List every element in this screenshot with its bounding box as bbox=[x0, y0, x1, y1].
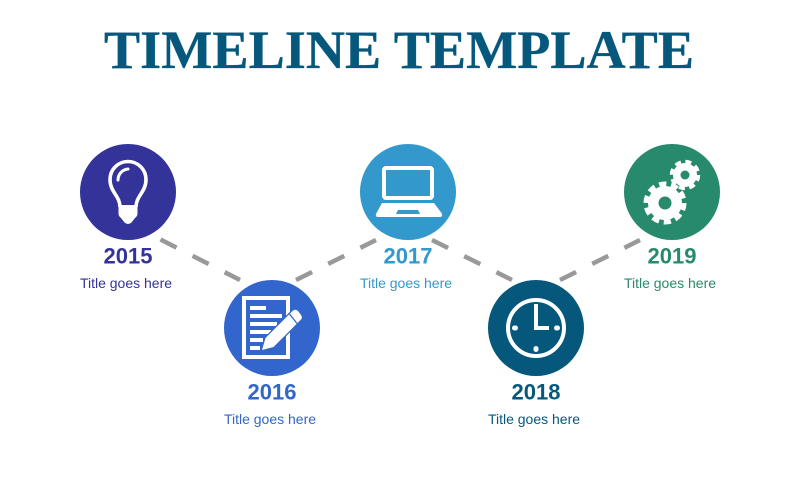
connector: 2018 to 2019 bbox=[560, 240, 640, 280]
label: 2015: Title goes here bbox=[80, 275, 172, 291]
year: 2016: 2016 bbox=[248, 380, 296, 404]
year: 2018: 2018 bbox=[512, 380, 560, 404]
milestone: 2019 bbox=[624, 144, 720, 291]
label: 2017: Title goes here bbox=[360, 275, 452, 291]
circle: 2017 bbox=[360, 144, 456, 240]
connector: 2016 to 2017 bbox=[296, 240, 376, 280]
year: 2015: 2015 bbox=[104, 244, 152, 268]
year: 2017: 2017 bbox=[384, 244, 432, 268]
icon: light bulb bbox=[110, 162, 146, 224]
circle: 2019 bbox=[624, 144, 720, 240]
icon: gears bbox=[646, 162, 698, 222]
circle: 2015 bbox=[80, 144, 176, 240]
label: 2016: Title goes here bbox=[224, 411, 316, 427]
milestone: 2016 bbox=[224, 280, 320, 427]
milestone: 2015 bbox=[80, 144, 176, 291]
year: 2019: 2019 bbox=[648, 244, 696, 268]
connector: 2015 to 2016 bbox=[160, 240, 240, 280]
icon: clock bbox=[508, 300, 564, 356]
circle: 2018 bbox=[488, 280, 584, 376]
milestone: 2017 bbox=[360, 144, 456, 291]
connector: 2017 to 2018 bbox=[432, 240, 512, 280]
title: TIMELINE TEMPLATE bbox=[104, 20, 694, 80]
icon: document and pencil bbox=[244, 298, 302, 357]
icon: laptop bbox=[376, 168, 442, 217]
milestone: 2018 bbox=[488, 280, 584, 427]
circle: 2016 bbox=[224, 280, 320, 376]
label: 2019: Title goes here bbox=[624, 275, 716, 291]
label: 2018: Title goes here bbox=[488, 411, 580, 427]
